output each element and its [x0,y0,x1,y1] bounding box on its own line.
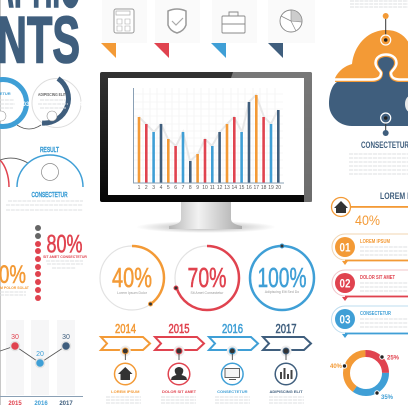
text lines [46,261,83,268]
tile: briefcase [211,0,257,58]
bar chart [133,88,284,191]
axis numbers: 20 [276,185,281,191]
ring 100 percent: 100% [258,262,306,293]
title: NTS [0,2,80,76]
80 percent: 80% [46,230,82,258]
axis [0,396,83,397]
labels: 25% [387,356,400,362]
ring 70 percent [174,246,239,310]
tile: shield [154,0,200,58]
orange bars [138,95,258,183]
step 2015: 2015 [168,322,190,336]
point labels: 30 [62,334,70,341]
axis numbers: 9 [196,185,199,191]
ring 100 percent [250,244,314,310]
top connector [381,13,391,45]
red segment [346,354,386,392]
labels: 35% [381,395,394,401]
labels [330,356,400,401]
item 03 [332,306,408,338]
step 2016 [209,322,258,403]
point labels: 30 [11,334,19,341]
screen [108,78,304,195]
panel: numbered list [332,234,408,338]
dot column [35,225,41,301]
step 2015: DOLOR SIT AMET [162,389,197,394]
panel: donut chart [330,354,400,401]
step 2016: CONSECTETUR [217,389,248,394]
panel: line chart [0,320,83,405]
item 01: 01 [340,240,351,254]
axis numbers: 19 [268,185,274,191]
orange cloud half [335,30,408,82]
line [0,346,66,363]
point labels [11,334,70,358]
item 03: 03 [340,312,351,326]
circle 04: 04 [75,101,83,108]
ring 70 percent: 70% [188,262,226,293]
puzzle gap [332,54,408,80]
puzzle notch [405,96,408,112]
dark bars [160,102,280,183]
axis numbers: 8 [189,185,192,191]
axis numbers: 4 [160,185,163,191]
shadow [136,221,276,233]
title [0,0,80,76]
step 2017: ADIPISCING ELIT [269,389,303,394]
panel: percent header [332,191,408,228]
circle 03: 03 [22,101,30,108]
panel: progress rings [100,244,314,310]
panel: puzzle cloud [329,1,408,174]
panel: timeline [101,322,311,403]
step 2014: 2014 [115,322,136,336]
blue segment [346,354,386,392]
panel: venn circles [0,78,83,129]
40 percent: 40% [355,212,380,228]
blue arc [17,155,83,187]
ring 40 percent [100,246,164,310]
axis numbers: 15 [239,185,245,191]
axis numbers: 13 [224,185,230,191]
top text lines [350,1,408,7]
orange percent: 0% [0,261,26,289]
blue bars [152,124,272,183]
legend [8,401,73,405]
axis numbers: 16 [246,185,252,191]
axis numbers: 5 [167,185,170,191]
heading: result: RESULT [40,147,59,154]
text lines [6,201,83,210]
heading: consectetur: CONSECTETUR [32,190,68,199]
axis numbers: 2 [145,185,148,191]
axis numbers: 7 [182,185,185,191]
item 02 [332,270,408,301]
point labels: 20 [36,351,44,358]
left edge rule [0,0,1,405]
circle 03 [0,80,30,126]
area trend [139,95,278,161]
points [10,342,70,368]
stand [169,202,242,229]
ring 70 percent: Sit Amet Consectetur [191,291,224,295]
item 02: 02 [340,276,351,290]
axes [134,88,284,183]
connector [17,125,41,129]
item 01 [332,234,408,265]
axis numbers: 3 [152,185,155,191]
orange caption: M POLOR SOLAT [0,286,30,290]
item 03: CONSECTETUR [360,311,391,317]
bezel [100,72,312,202]
tile: calculator [101,0,147,58]
labels: 40% [330,364,343,370]
red arc [0,160,9,187]
icon: house [332,198,350,216]
tile: pie chart [268,0,315,58]
columns [6,320,75,395]
ring 100 percent: Adipiscing Elit Sed Do [265,290,299,294]
circle 04: ADIPISCING ELIT [38,92,66,97]
item 01: LOREM IPSUM [360,239,390,245]
panel: dots 80 percent [0,225,87,301]
connector arc [0,158,28,163]
axis numbers: 11 [210,185,215,191]
red bars [145,117,265,183]
step 2017: 2017 [276,322,297,336]
dark cloud half [329,57,408,126]
axis numbers: 17 [254,185,259,191]
axis numbers [138,185,281,191]
ring 40 percent: 40% [112,262,152,293]
step 2014 [101,322,150,403]
ring 40 percent: Lorem Ipsum Dolor [117,291,148,295]
icon: pie [42,164,58,180]
item 02: DOLOR SIT AMET [360,275,395,281]
rule [350,206,408,208]
circle 04 [32,78,83,128]
axis numbers: 18 [261,185,267,191]
axis numbers: 1 [138,185,141,191]
panel: monitor [100,72,312,233]
caption: SIT AMET CONSECTETUR [43,255,87,259]
step 2015 [155,322,204,403]
axis numbers: 14 [232,185,237,191]
grid [133,88,283,183]
step 2014: LOREM IPSUM [111,389,140,394]
step 2016: 2016 [222,322,243,336]
orange segment [346,354,386,392]
bottom connector [381,113,391,136]
markers [342,355,384,395]
text lines [0,292,26,295]
step 2017 [263,322,311,403]
text lines [349,154,408,174]
axis numbers: 10 [202,185,208,191]
panel: icon tiles [101,0,315,58]
axis numbers: 12 [217,185,223,191]
gloss [231,72,312,202]
panel: result gauge [0,147,83,210]
axis numbers: 6 [174,185,177,191]
